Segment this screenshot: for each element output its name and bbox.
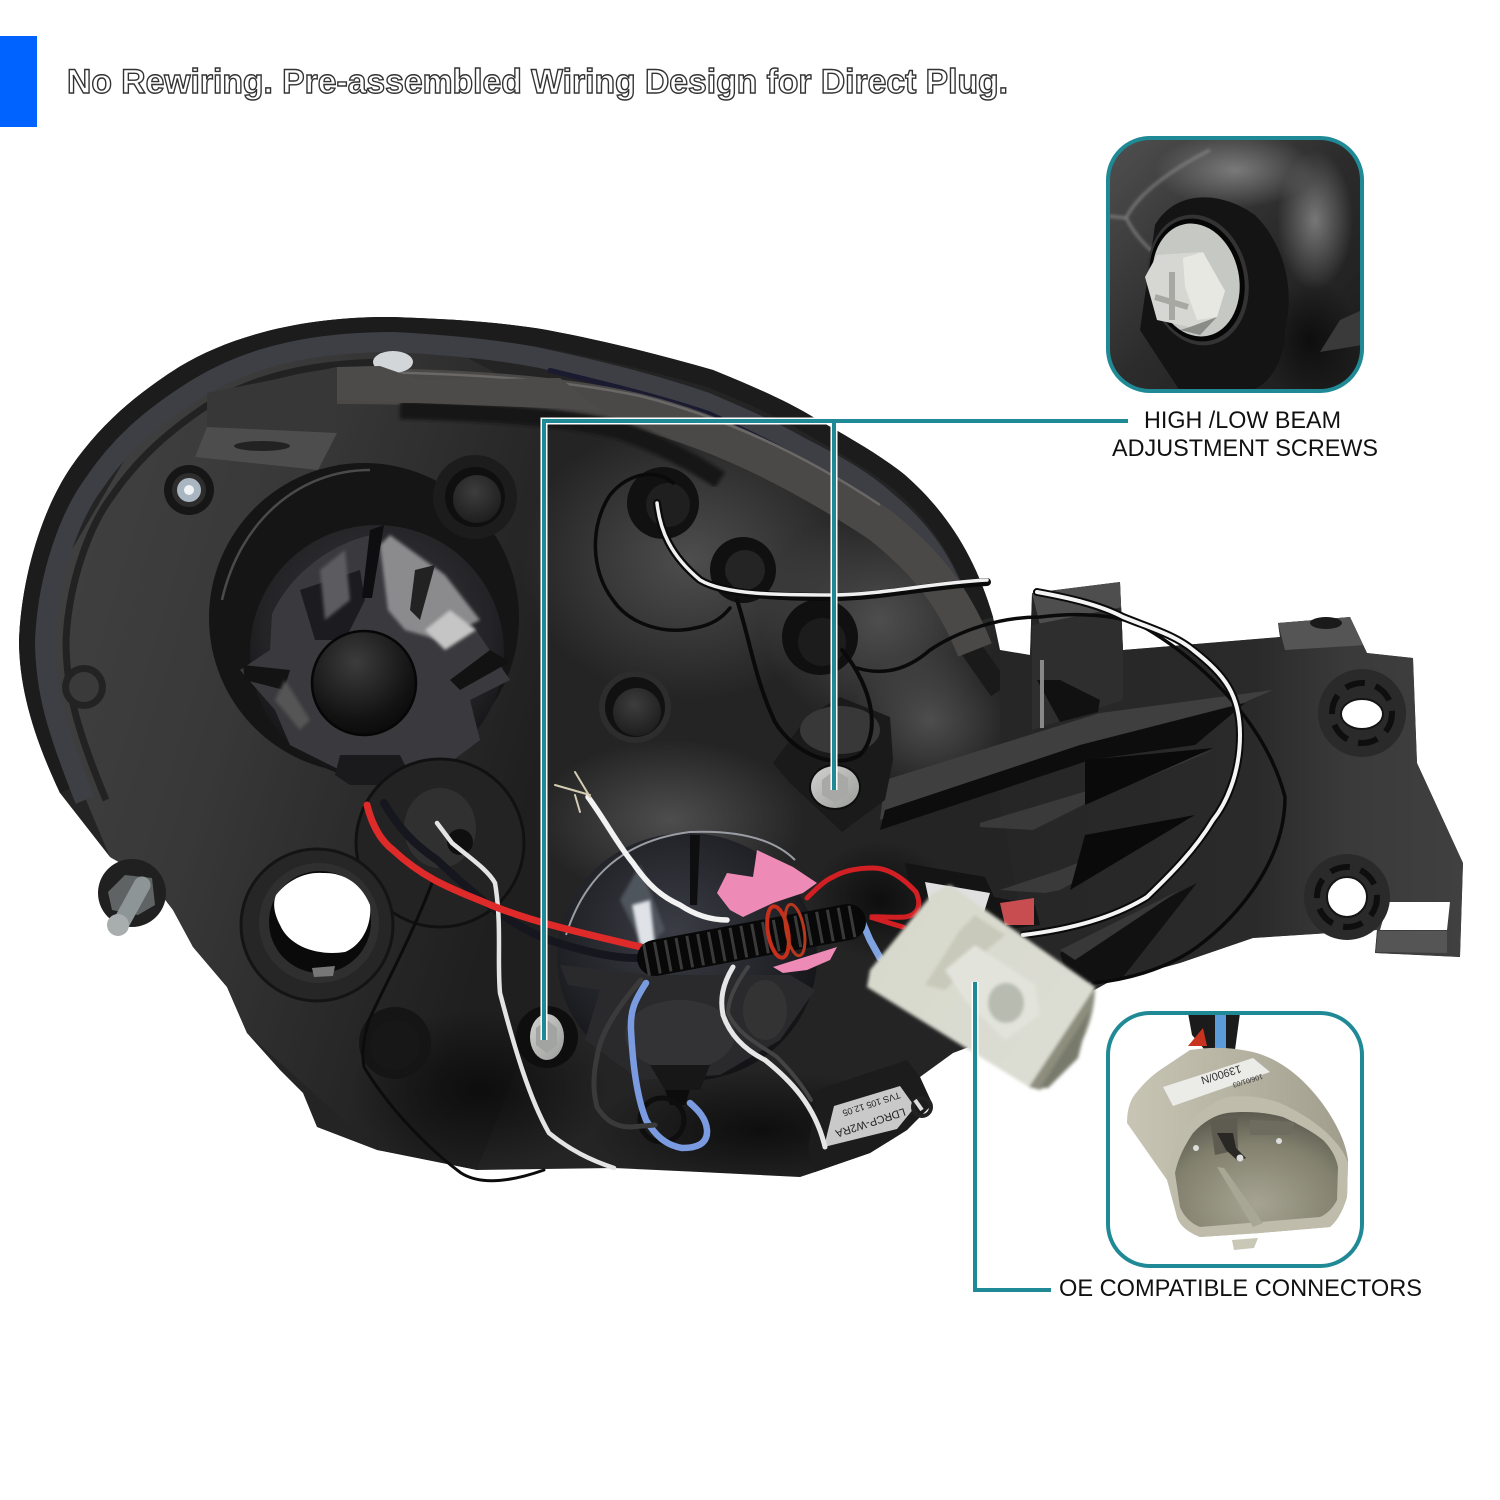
peg and screw on left flange — [62, 465, 214, 709]
red wire — [367, 805, 919, 947]
grey connector plug — [867, 885, 1095, 1090]
relay label module — [808, 1060, 932, 1172]
bracket corner notch — [1380, 902, 1450, 930]
lower dome — [557, 832, 817, 1142]
bracket — [1000, 582, 1463, 1020]
corner box shade — [1376, 931, 1447, 953]
screw lower left — [516, 1006, 578, 1068]
small round grommets — [359, 455, 858, 1079]
inset: adjustment screw closeup — [1108, 132, 1362, 400]
corrugated wire loom — [645, 903, 860, 960]
upper tab and lens pip — [195, 351, 600, 470]
accent bar — [0, 36, 37, 127]
large dome with ribbed cap — [209, 463, 519, 785]
label: adjustment screws: HIGH /LOW BEAM — [1144, 407, 1341, 434]
black thin wires — [363, 474, 1285, 1181]
blue and gray wires — [594, 912, 880, 1148]
relay label module: LDRCP-W2RA — [833, 1105, 907, 1139]
label: adjustment screws: ADJUSTMENT SCREWS — [1112, 435, 1378, 462]
inset: connector closeup — [1108, 1013, 1362, 1266]
side stud bolt — [98, 859, 166, 936]
screw right — [773, 697, 893, 832]
round hole — [241, 849, 393, 1001]
pink foam — [717, 850, 837, 973]
gasket rim — [19, 317, 1000, 800]
headlight rear view photo illustration — [0, 300, 1480, 1210]
inset: connector closeup: 13900/N — [1199, 1062, 1243, 1086]
title: No Rewiring. Pre-assembled Wiring Design for Direct Plug. — [67, 63, 1008, 101]
white wires — [437, 772, 727, 1168]
relay label module: TVS 105 12.05 — [841, 1090, 901, 1118]
bracket mount holes — [1304, 617, 1406, 940]
grommet ring — [356, 759, 524, 927]
black and white twin wires — [657, 503, 1240, 935]
label: connectors: OE COMPATIBLE CONNECTORS — [1059, 1275, 1422, 1302]
housing body — [0, 300, 1480, 1210]
inset: connector closeup: 106/01/03 — [1232, 1072, 1263, 1088]
callout lines — [544, 421, 1128, 1290]
module with tag near connector — [905, 863, 1040, 935]
